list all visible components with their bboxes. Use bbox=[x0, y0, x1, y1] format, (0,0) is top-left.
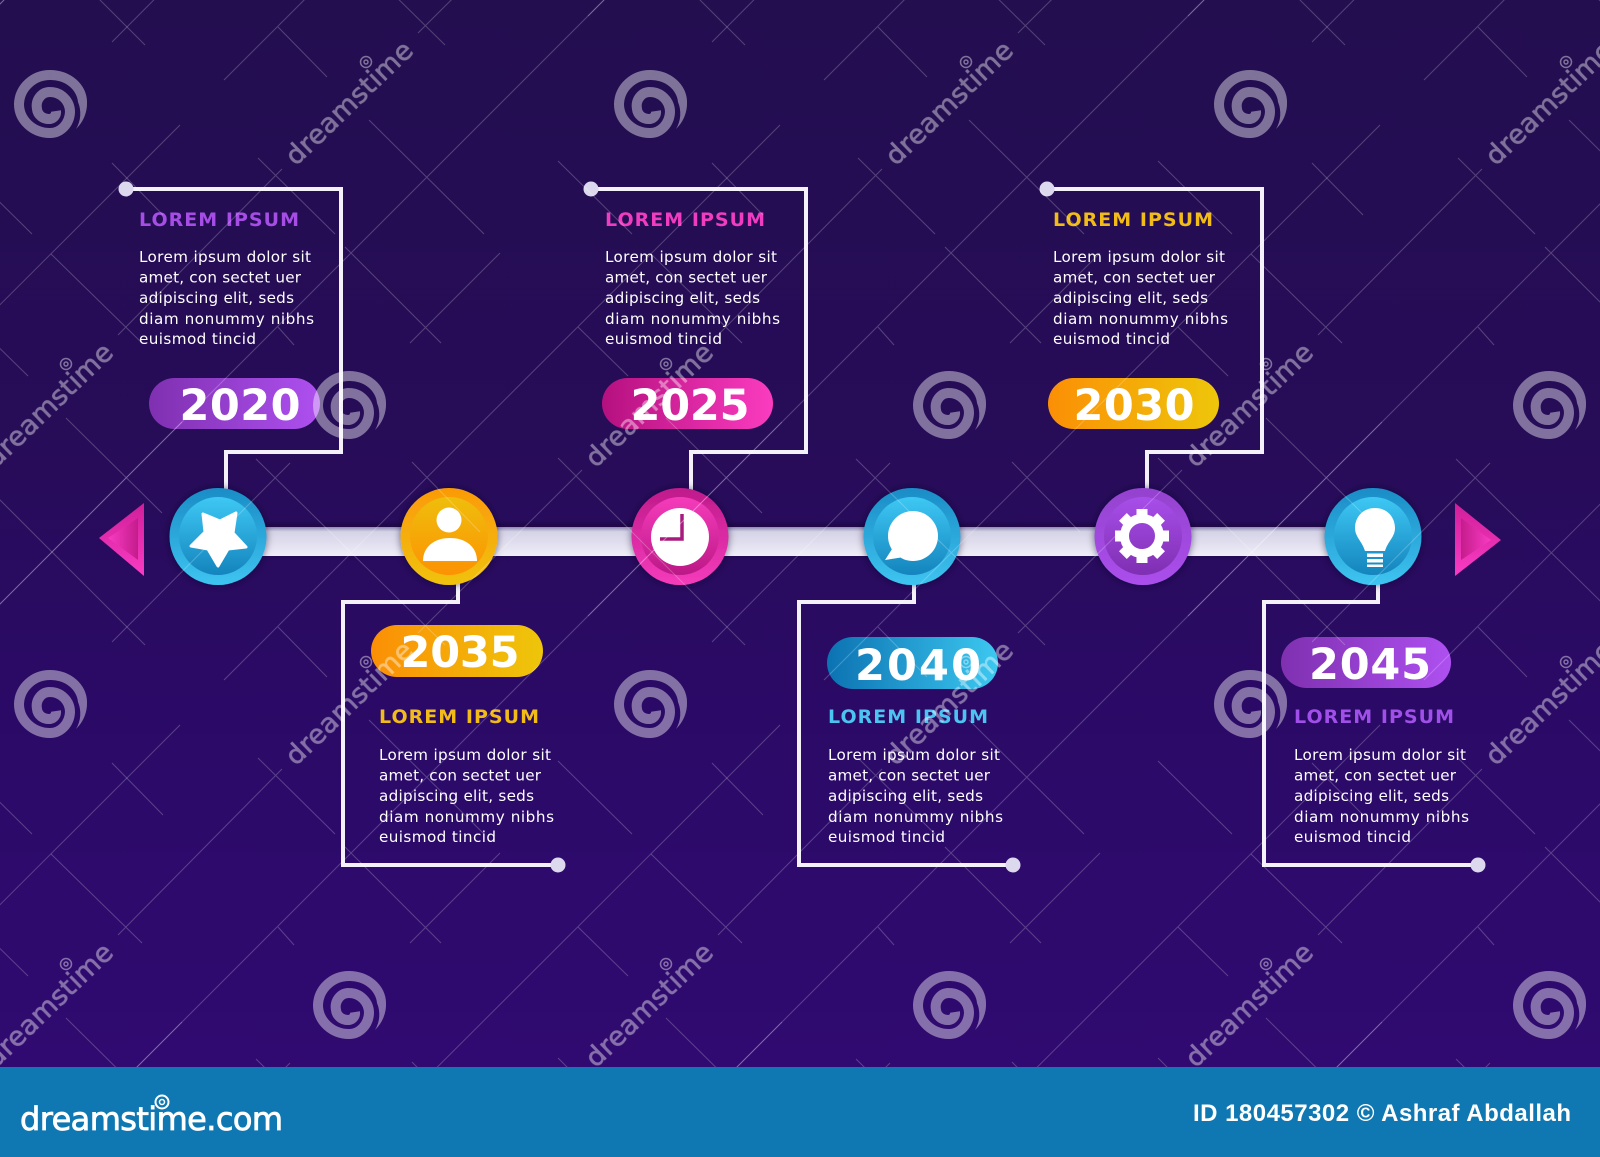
text block 2025: diam nonummy nibhs bbox=[605, 310, 780, 328]
text block 2040: adipiscing elit, seds bbox=[828, 787, 983, 805]
text block 2035: amet, con sectet uer bbox=[379, 766, 542, 784]
text block 2025: adipiscing elit, seds bbox=[605, 289, 760, 307]
watermark: dreamstime text: dreamstime bbox=[1179, 937, 1319, 1074]
watermark: dreamstime text: dreamstime bbox=[579, 337, 719, 474]
panel: 2045 bbox=[1264, 580, 1486, 872]
year pill 2045 bbox=[1281, 637, 1451, 690]
text block 2035: euismod tincid bbox=[379, 828, 496, 846]
year pill 2020: 2020 bbox=[180, 381, 300, 431]
panel: 2030 bbox=[1040, 182, 1262, 495]
connector 2035 bbox=[343, 580, 566, 872]
text block 2040: amet, con sectet uer bbox=[828, 766, 991, 784]
text block 2030: euismod tincid bbox=[1053, 330, 1170, 348]
text block 2035: Lorem ipsum dolor sit bbox=[379, 746, 551, 764]
arrow: right bbox=[1455, 503, 1501, 576]
connector 2025 bbox=[584, 182, 806, 495]
panel: 2020 bbox=[118, 182, 341, 495]
text block 2025: amet, con sectet uer bbox=[605, 268, 768, 286]
text block 2040 bbox=[828, 746, 1003, 846]
text block 2040: euismod tincid bbox=[828, 828, 945, 846]
year pill 2030: 2030 bbox=[1074, 381, 1194, 431]
connector 2020 bbox=[118, 182, 341, 495]
text block 2030 bbox=[1053, 248, 1228, 348]
text block 2045: adipiscing elit, seds bbox=[1294, 787, 1449, 805]
text block 2030: Lorem ipsum dolor sit bbox=[1053, 248, 1225, 266]
watermark: dreamstime text: dreamstime bbox=[579, 937, 719, 1074]
text block 2020: euismod tincid bbox=[139, 330, 256, 348]
year pill 2020 bbox=[149, 378, 320, 431]
footer logo: dreamstime.com bbox=[20, 1100, 283, 1138]
watermark: dreamstime text: dreamstime bbox=[279, 635, 419, 772]
text block 2045: Lorem ipsum dolor sit bbox=[1294, 746, 1466, 764]
text block 2035 bbox=[379, 746, 554, 846]
heading 2025: LOREM IPSUM bbox=[605, 209, 765, 231]
heading 2035: LOREM IPSUM bbox=[379, 706, 539, 728]
timeline bar bbox=[255, 527, 1345, 556]
text block 2035: adipiscing elit, seds bbox=[379, 787, 534, 805]
text block 2020 bbox=[139, 248, 314, 348]
text block 2020: Lorem ipsum dolor sit bbox=[139, 248, 311, 266]
heading 2045: LOREM IPSUM bbox=[1294, 706, 1454, 728]
watermark: dreamstime text: dreamstime bbox=[879, 35, 1019, 172]
text block 2030: amet, con sectet uer bbox=[1053, 268, 1216, 286]
text block 2035: diam nonummy nibhs bbox=[379, 808, 554, 826]
icon: light bulb bbox=[1324, 488, 1422, 585]
text block 2045: amet, con sectet uer bbox=[1294, 766, 1457, 784]
text block 2045 bbox=[1294, 746, 1469, 846]
footer bar bbox=[0, 1067, 1600, 1157]
text block 2040: Lorem ipsum dolor sit bbox=[828, 746, 1000, 764]
year pill 2035: 2035 bbox=[400, 628, 520, 678]
text block 2045: euismod tincid bbox=[1294, 828, 1411, 846]
icon: gear bbox=[1094, 488, 1192, 585]
text block 2020: adipiscing elit, seds bbox=[139, 289, 294, 307]
connector 2045 bbox=[1264, 580, 1486, 872]
text block 2020: amet, con sectet uer bbox=[139, 268, 302, 286]
year pill 2025 bbox=[602, 378, 773, 431]
heading 2020: LOREM IPSUM bbox=[139, 209, 299, 231]
text block 2025: euismod tincid bbox=[605, 330, 722, 348]
text block 2025: Lorem ipsum dolor sit bbox=[605, 248, 777, 266]
icon: clock bbox=[632, 488, 728, 585]
text block 2045: diam nonummy nibhs bbox=[1294, 808, 1469, 826]
text block 2030: adipiscing elit, seds bbox=[1053, 289, 1208, 307]
text block 2020: diam nonummy nibhs bbox=[139, 310, 314, 328]
year pill 2030 bbox=[1048, 378, 1219, 431]
icon: speech bubble bbox=[864, 488, 960, 585]
watermark: dreamstime text: dreamstime bbox=[1179, 337, 1319, 474]
connector 2030 bbox=[1040, 182, 1262, 495]
panel: 2035 bbox=[343, 580, 566, 872]
year pill 2035 bbox=[371, 625, 543, 678]
year pill 2040: 2040 bbox=[855, 641, 981, 691]
watermark: dreamstime text: dreamstime bbox=[879, 635, 1019, 772]
footer credit: ID 180457302 © Ashraf Abdallah bbox=[1193, 1100, 1571, 1127]
icon: star bbox=[170, 488, 266, 585]
panel: 2025 bbox=[584, 182, 806, 495]
connector 2040 bbox=[799, 580, 1020, 872]
text block 2030: diam nonummy nibhs bbox=[1053, 310, 1228, 328]
heading 2030: LOREM IPSUM bbox=[1053, 209, 1213, 231]
arrow: left bbox=[99, 503, 144, 576]
text block 2040: diam nonummy nibhs bbox=[828, 808, 1003, 826]
year pill 2025: 2025 bbox=[630, 381, 750, 431]
watermark: dreamstime text: dreamstime bbox=[279, 35, 419, 172]
year pill 2040 bbox=[827, 637, 998, 691]
text block 2025 bbox=[605, 248, 780, 348]
year pill 2045: 2045 bbox=[1309, 640, 1431, 690]
icon: person bbox=[400, 488, 498, 585]
heading 2040: LOREM IPSUM bbox=[828, 706, 988, 728]
panel: 2040 bbox=[799, 580, 1020, 872]
